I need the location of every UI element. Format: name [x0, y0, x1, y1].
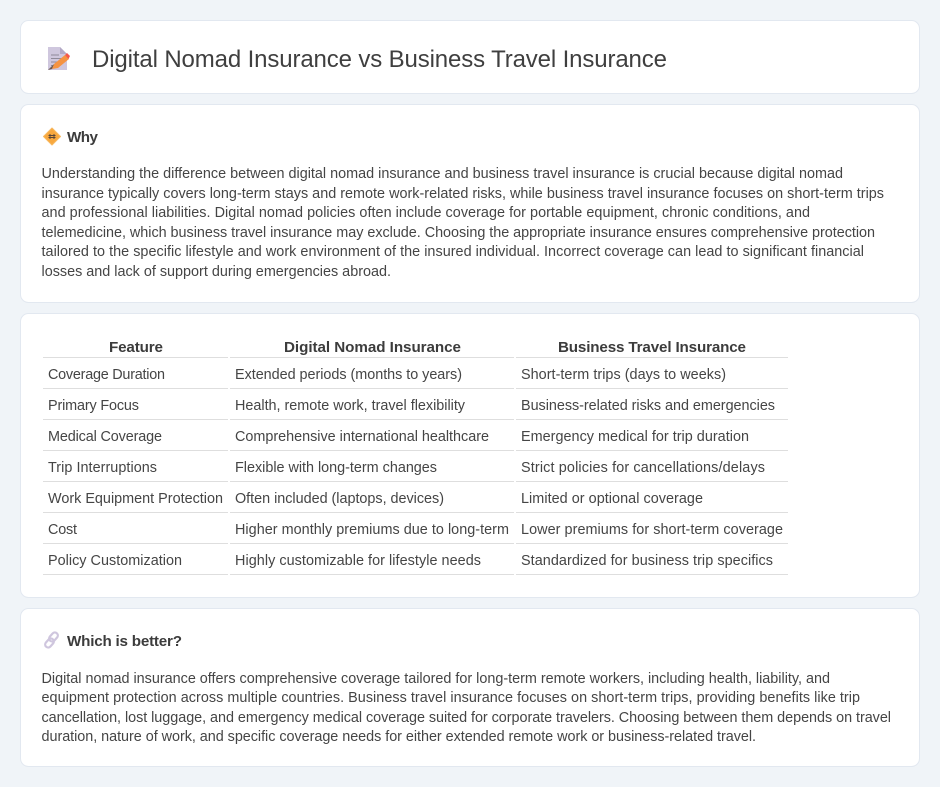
- panel: why: [20, 104, 920, 302]
- text block: why paragraph: telemedicine, which business travel insurance may exclude. Choosing the appropriate insurance ensures comprehensive protection: [42, 225, 875, 241]
- table row: policy customization: Standardized for business trip specifics: [521, 553, 773, 569]
- table row: coverage duration: Short-term trips (days to weeks): [521, 367, 726, 383]
- panel: which is better: [20, 608, 920, 766]
- table row: coverage duration: Coverage Duration: [48, 367, 165, 383]
- table row: cost: [43, 522, 788, 544]
- icon: link: [44, 631, 59, 649]
- table row: work equipment protection: Often included (laptops, devices): [235, 491, 444, 507]
- table row: work equipment protection: [43, 491, 788, 512]
- text block: why paragraph: [42, 166, 884, 280]
- table row: work equipment protection: Limited or optional coverage: [521, 491, 703, 507]
- table header row: Digital Nomad Insurance: [284, 339, 461, 356]
- table row: medical coverage: Medical Coverage: [48, 429, 162, 445]
- table row: cost: Lower premiums for short-term coverage: [521, 522, 783, 538]
- table row: coverage duration: [43, 367, 788, 388]
- table row: trip interruptions: [43, 460, 788, 482]
- title: Digital Nomad Insurance vs Business Travel Insurance: [92, 46, 667, 73]
- icon: warning diamond: [44, 128, 60, 145]
- icon: document with pencil: [48, 47, 70, 70]
- text block: which paragraph: [42, 671, 891, 745]
- table row: policy customization: [43, 553, 788, 574]
- heading: which is better: Which is better?: [67, 633, 182, 650]
- text block: why paragraph: losses and lack of support during emergencies abroad.: [42, 264, 391, 280]
- table row: primary focus: Business-related risks and emergencies: [521, 398, 775, 414]
- table header row: Feature: [109, 339, 163, 356]
- panel: comparison table: [20, 314, 920, 598]
- table row: trip interruptions: Flexible with long-term changes: [235, 460, 437, 476]
- table row: primary focus: [43, 398, 788, 420]
- text block: why paragraph: insurance typically covers long-term stays and remote work-related risks, while business travel insurance focuses on short-term trips: [42, 186, 884, 202]
- panel: header: [20, 20, 920, 94]
- table row: medical coverage: Comprehensive international healthcare: [235, 429, 489, 445]
- table header row: Business Travel Insurance: [558, 339, 746, 356]
- table row: medical coverage: [43, 429, 788, 450]
- heading: why: Why: [67, 129, 99, 146]
- text block: which paragraph: cancellation, lost luggage, and emergency medical coverage suited for corporate travelers. Choosing between them depends on travel: [42, 710, 891, 726]
- table row: cost: Higher monthly premiums due to long-term: [235, 522, 509, 538]
- text block: which paragraph: Digital nomad insurance offers comprehensive coverage tailored for long-term remote workers, including health, liability, and: [42, 671, 830, 687]
- table row: coverage duration: Extended periods (months to years): [235, 367, 462, 383]
- table header row: [43, 339, 788, 358]
- table row: policy customization: Policy Customization: [48, 553, 182, 569]
- text block: why paragraph: and professional liabilities. Digital nomad policies often include coverage for portable equipment, chronic conditions, and: [42, 205, 810, 221]
- table row: primary focus: Primary Focus: [48, 398, 139, 414]
- table row: medical coverage: Emergency medical for trip duration: [521, 429, 749, 445]
- table row: trip interruptions: Trip Interruptions: [48, 460, 157, 476]
- table row: trip interruptions: Strict policies for cancellations/delays: [521, 460, 765, 476]
- text block: which paragraph: equipment protection across multiple countries. Business travel insurance focuses on short-term trips, providing benefits like trip: [42, 690, 860, 706]
- text block: why paragraph: Understanding the difference between digital nomad insurance and business travel insurance is crucial because digital nomad: [42, 166, 843, 182]
- text block: which paragraph: duration, nature of work, and specific coverage needs for either extended remote work or business-related travel.: [42, 729, 756, 745]
- table row: primary focus: Health, remote work, travel flexibility: [235, 398, 466, 414]
- table row: work equipment protection: Work Equipment Protection: [48, 491, 223, 507]
- table row: policy customization: Highly customizable for lifestyle needs: [235, 553, 481, 569]
- text block: why paragraph: tailored to the specific lifestyle and work environment of the insured individual. Incorrect coverage can lead to significant financial: [42, 244, 864, 260]
- table row: cost: Cost: [48, 522, 77, 538]
